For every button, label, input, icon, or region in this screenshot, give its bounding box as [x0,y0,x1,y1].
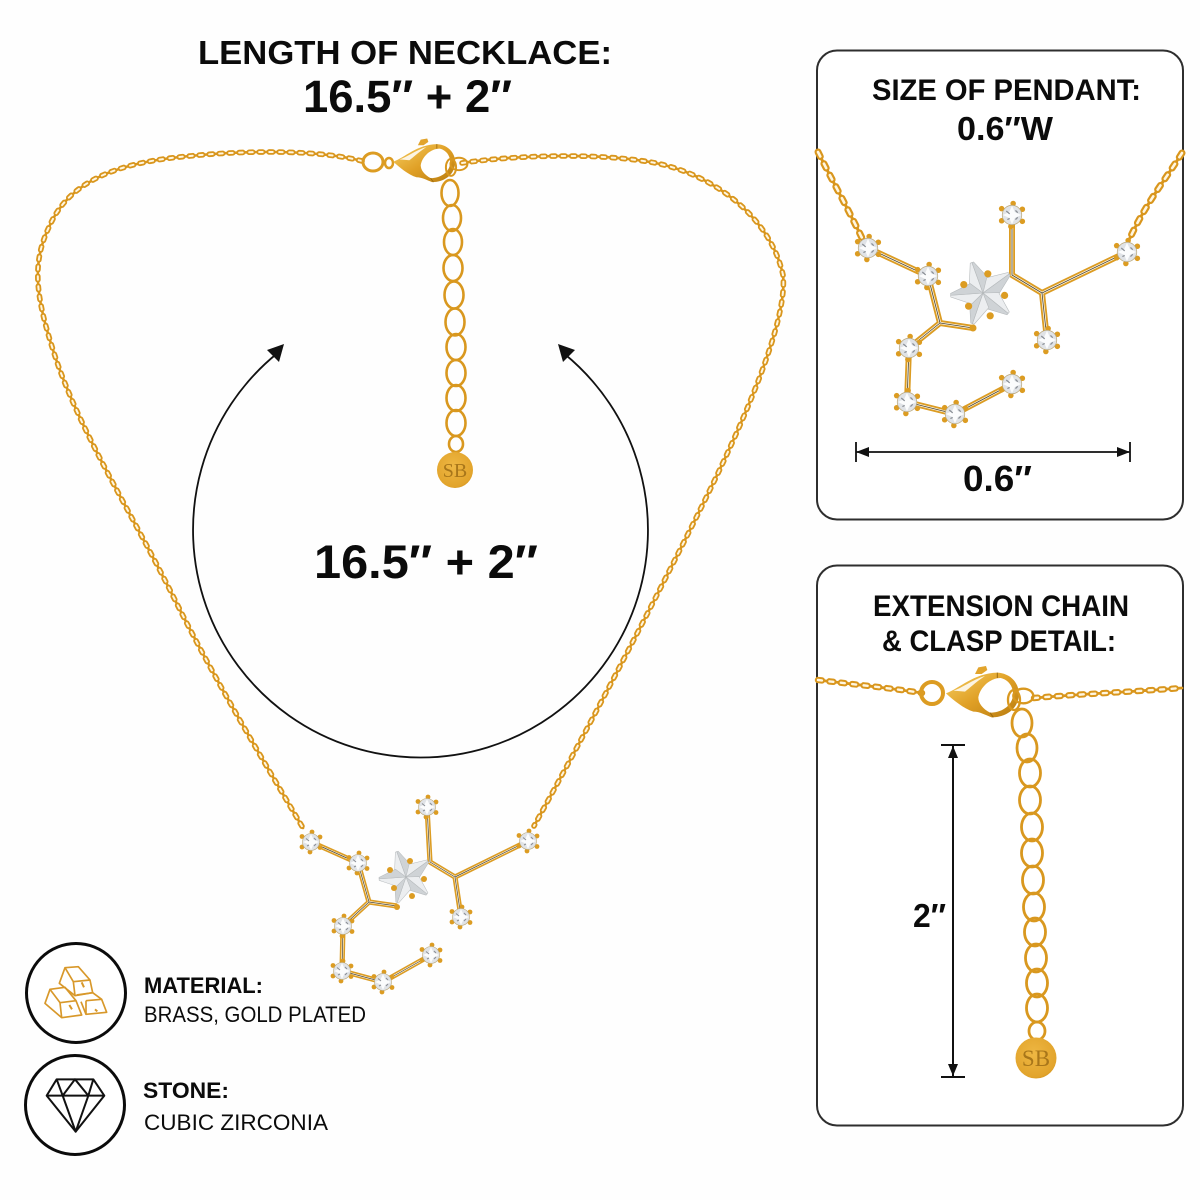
width dimension arrow [856,442,1130,462]
panel: extension chain and clasp [817,566,1183,1126]
material text [144,973,366,1027]
stone text: CUBIC ZIRCONIA [144,1110,328,1135]
pendant tag detail: SB: SB [1022,1046,1050,1071]
panel heading: extension chain: & CLASP DETAIL: [882,625,1116,658]
title: length of necklace: 16.5″ + 2″ [303,71,512,122]
constellation pendant: main [300,795,539,994]
constellation pendant: detail [855,201,1140,428]
panel: size of pendant [817,50,1183,520]
title: length of necklace [198,34,612,122]
panel heading: size of pendant [872,74,1141,147]
icon: diamond [26,1056,124,1154]
stone text: STONE: [143,1078,229,1103]
pendant tag: SB [437,452,473,488]
panel heading: extension chain [873,590,1129,658]
width label: 0.6″ [963,458,1032,499]
panel chain ends [818,152,1182,238]
height label: 2″ [913,897,946,934]
title: length of necklace: LENGTH OF NECKLACE: [198,34,612,71]
icon: gold bars [26,944,126,1042]
necklace chain [38,152,783,828]
panel heading: size of pendant: SIZE OF PENDANT: [872,74,1141,107]
stone text [143,1078,328,1135]
panel heading: extension chain: EXTENSION CHAIN [873,590,1129,623]
arrow: right arc [420,344,648,758]
detail chain [818,680,1182,698]
material text: BRASS, GOLD PLATED [144,1002,366,1027]
material text: MATERIAL: [144,973,263,998]
pendant tag detail: SB [1016,1038,1056,1078]
arrow: left arc [193,344,420,758]
clasp detail [921,666,1033,717]
panel heading: size of pendant: 0.6″W [957,110,1054,147]
extension chain detail [1012,709,1048,1040]
clasp: main necklace [363,138,467,182]
height dimension arrow [941,745,965,1077]
extension chain: main necklace [442,180,466,452]
pendant tag: SB: SB [443,460,467,482]
length label: 16.5″ + 2″ [314,535,538,588]
